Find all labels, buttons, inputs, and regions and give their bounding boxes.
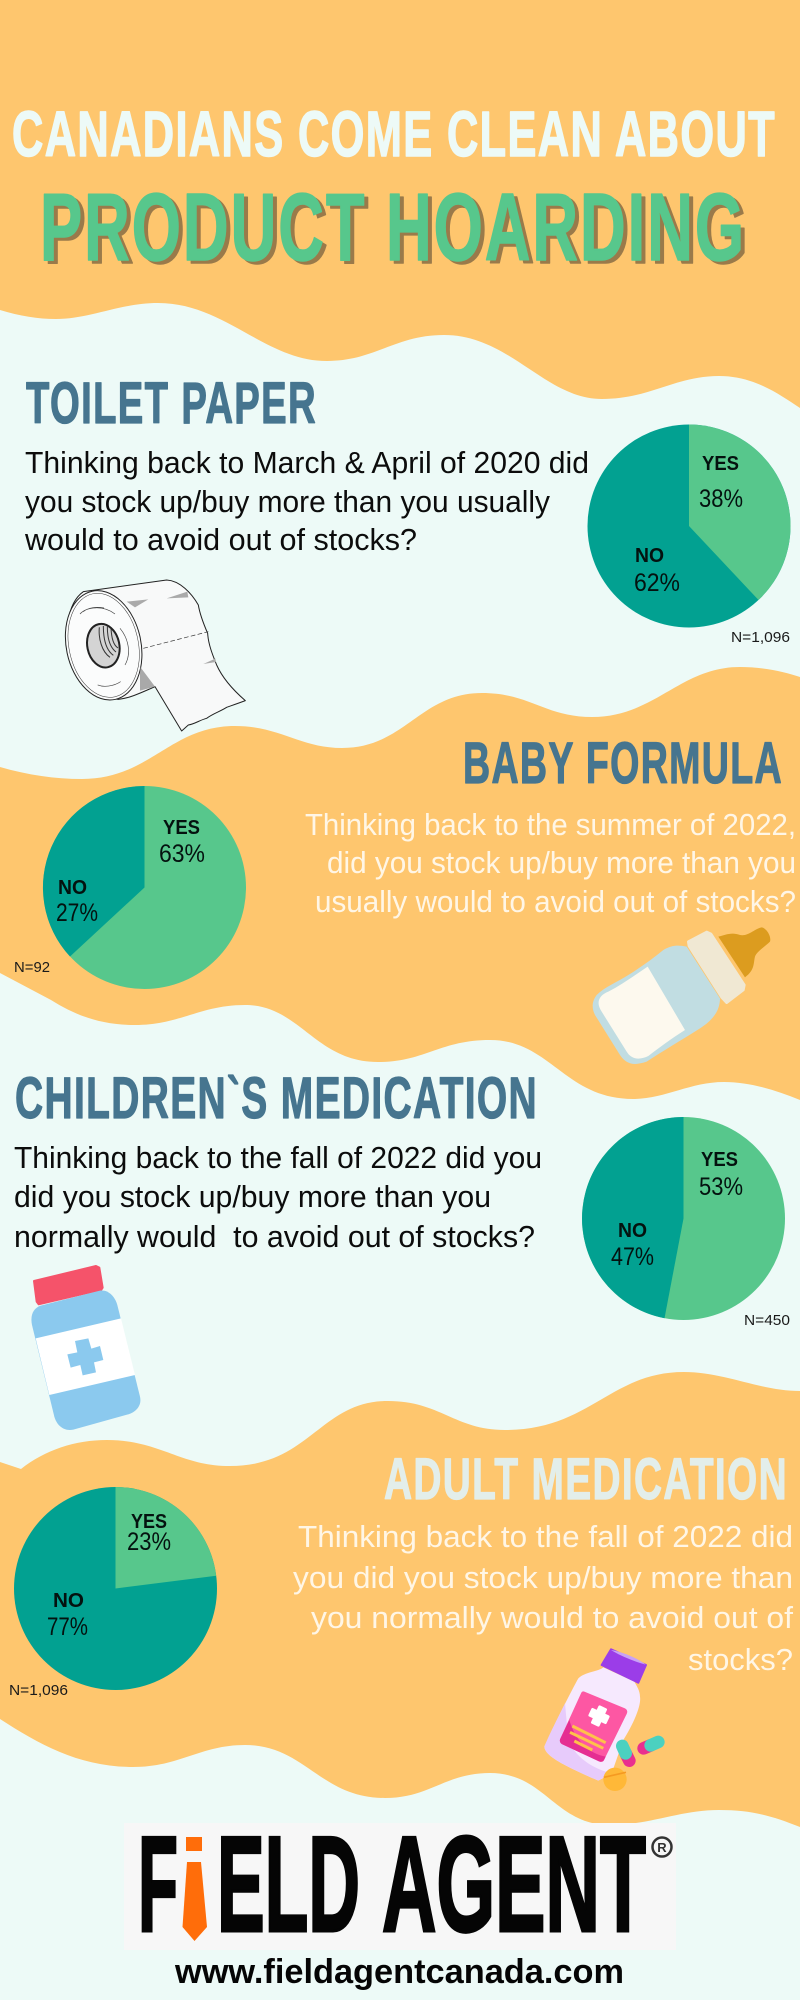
pie chart: yes 63 no 27: NO: [58, 877, 87, 899]
question text: you did you stock up/buy more than: [293, 1560, 793, 1595]
question text: normally would to avoid out of stocks?: [14, 1219, 535, 1254]
logo: field agent: F: [138, 1808, 178, 1960]
heading: children's medication: CHILDREN`S MEDICATION: [15, 1066, 538, 1131]
question text: [293, 1519, 793, 1677]
icon: medicine bottle: [31, 1266, 140, 1430]
logo tie letter i: [182, 1837, 207, 1941]
question text: Thinking back to March & April of 2020 did: [25, 445, 589, 480]
baby formula wave panel: [0, 667, 800, 1100]
pie chart: yes 23 no 77: 77%: [47, 1613, 88, 1641]
panel: adult medication: [9, 1447, 793, 1791]
pie chart: yes 53 no 47: NO: [618, 1220, 647, 1242]
sample size note: N=1,096: [731, 629, 790, 646]
pie chart: yes 23 no 77: 23%: [127, 1528, 171, 1556]
question text: [305, 807, 796, 919]
question text: you normally would to avoid out of: [311, 1600, 793, 1635]
pie chart: yes 38 no 62: NO: [635, 545, 664, 567]
icon: pill bottle and capsules: [544, 1649, 658, 1791]
pie chart: yes 53 no 47: 53%: [699, 1173, 743, 1201]
logo: field agent: [124, 1808, 676, 1960]
question text: you stock up/buy more than you usually: [25, 484, 550, 519]
sample size note: N=92: [14, 959, 50, 976]
panel: toilet paper: [24, 371, 791, 731]
website url: www.fieldagentcanada.com: [174, 1953, 624, 1991]
registered mark: [652, 1838, 672, 1856]
adult medication wave panel: [0, 1372, 800, 1827]
icon: toilet paper roll: [56, 580, 245, 731]
question text: did you stock up/buy more than you: [14, 1179, 491, 1214]
pie chart: yes 38 no 62: YES: [702, 453, 739, 475]
pie chart: yes 38 no 62: [588, 424, 791, 628]
icon: baby bottle: [593, 927, 770, 1064]
sample size note: N=1,096: [9, 1682, 68, 1699]
question text: would to avoid out of stocks?: [24, 522, 417, 557]
panel: children's medication: [14, 1066, 790, 1430]
pie chart: yes 63 no 27: 63%: [159, 840, 205, 868]
registered mark: R: [657, 1840, 667, 1855]
question text: Thinking back to the fall of 2022 did you: [14, 1140, 542, 1175]
pie chart: yes 23 no 77: [14, 1487, 217, 1690]
logo wordmark ELD: ELD: [217, 1808, 360, 1960]
sample size note: N=450: [744, 1312, 790, 1329]
question text: Thinking back to the fall of 2022 did: [298, 1519, 793, 1554]
pie chart: yes 53 no 47: [582, 1117, 785, 1320]
pie chart: yes 63 no 27: [43, 786, 246, 989]
pie chart: yes 38 no 62: 62%: [634, 569, 680, 597]
panel: baby formula: [14, 731, 796, 1064]
pie chart: yes 38 no 62: 38%: [699, 485, 743, 513]
heading: toilet paper: TOILET PAPER: [26, 371, 317, 436]
pie chart: yes 53 no 47: YES: [701, 1149, 738, 1171]
pie chart: yes 23 no 77: YES: [131, 1511, 167, 1533]
pie chart: yes 23 no 77: NO: [53, 1590, 84, 1612]
question text: stocks?: [688, 1642, 793, 1677]
title: [12, 98, 776, 281]
pie chart: yes 63 no 27: YES: [163, 817, 200, 839]
pie chart: yes 63 no 27: 27%: [56, 899, 98, 927]
question text: [24, 445, 589, 557]
header wave background: [0, 0, 800, 408]
pie chart: yes 53 no 47: 47%: [611, 1243, 654, 1271]
question text: [14, 1140, 542, 1254]
